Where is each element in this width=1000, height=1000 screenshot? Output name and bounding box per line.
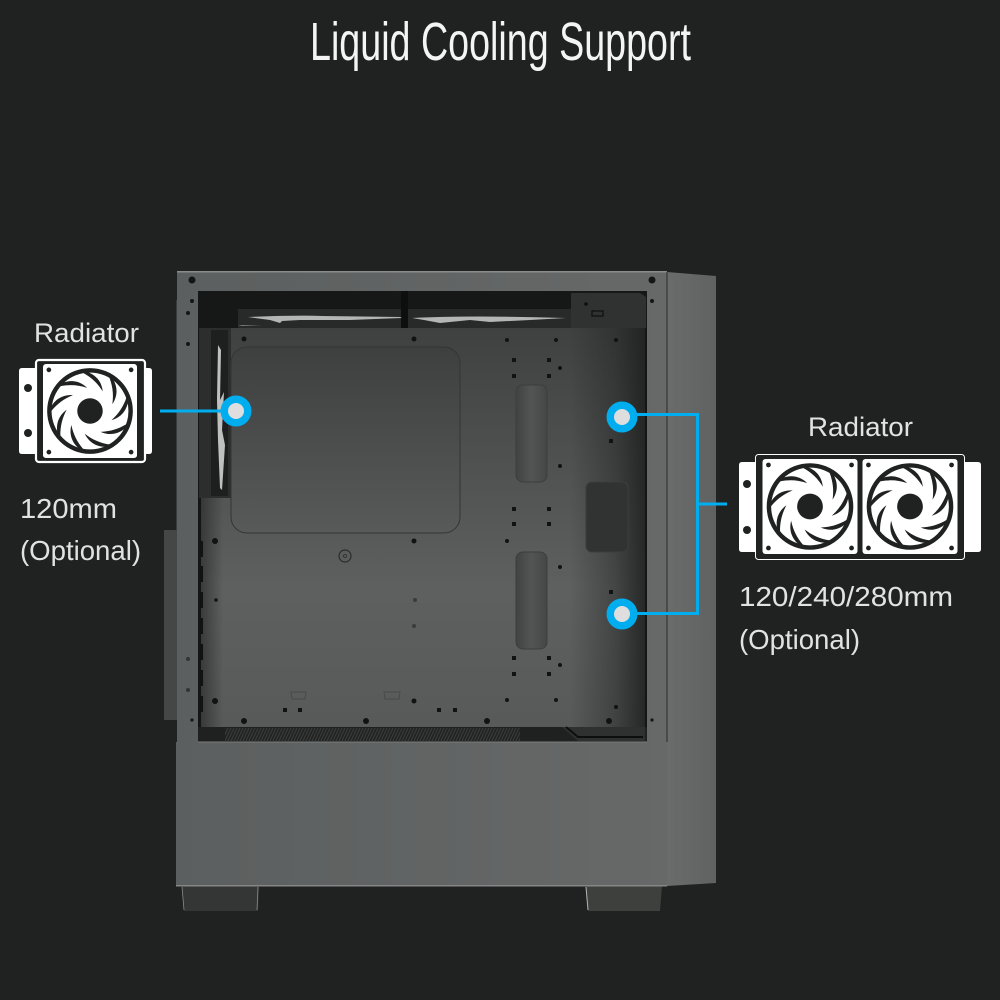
large CPU cutout bbox=[231, 347, 460, 533]
panel holes bbox=[200, 336, 618, 724]
left side fan bbox=[199, 328, 231, 498]
right radiator icon bbox=[739, 454, 981, 560]
left radiator label: Radiator bbox=[34, 318, 139, 348]
cable slots bbox=[516, 385, 628, 649]
right size text: 120/240/280mm bbox=[739, 581, 953, 612]
left size text: 120mm bbox=[20, 493, 117, 524]
left size text: (Optional) bbox=[20, 535, 141, 566]
right size text bbox=[739, 581, 953, 655]
case feet bbox=[182, 886, 662, 911]
case side panel bbox=[667, 272, 716, 886]
right connector bbox=[606, 402, 727, 630]
case bottom panel bbox=[176, 742, 667, 885]
motherboard standoff ring and tabs bbox=[291, 550, 400, 699]
bottom shroud bbox=[198, 727, 647, 742]
top fans bbox=[198, 291, 647, 328]
PC case bbox=[164, 271, 716, 911]
interior back panel bbox=[198, 291, 647, 742]
left size text bbox=[20, 493, 141, 566]
left radiator icon bbox=[19, 360, 152, 462]
right size text: (Optional) bbox=[739, 624, 860, 655]
left connector bbox=[160, 396, 252, 426]
title: Liquid Cooling Support bbox=[310, 12, 691, 72]
frame holes bbox=[186, 276, 656, 722]
right radiator label: Radiator bbox=[808, 412, 913, 442]
left side drive bracket bbox=[164, 530, 177, 720]
case front frame bbox=[177, 272, 667, 742]
